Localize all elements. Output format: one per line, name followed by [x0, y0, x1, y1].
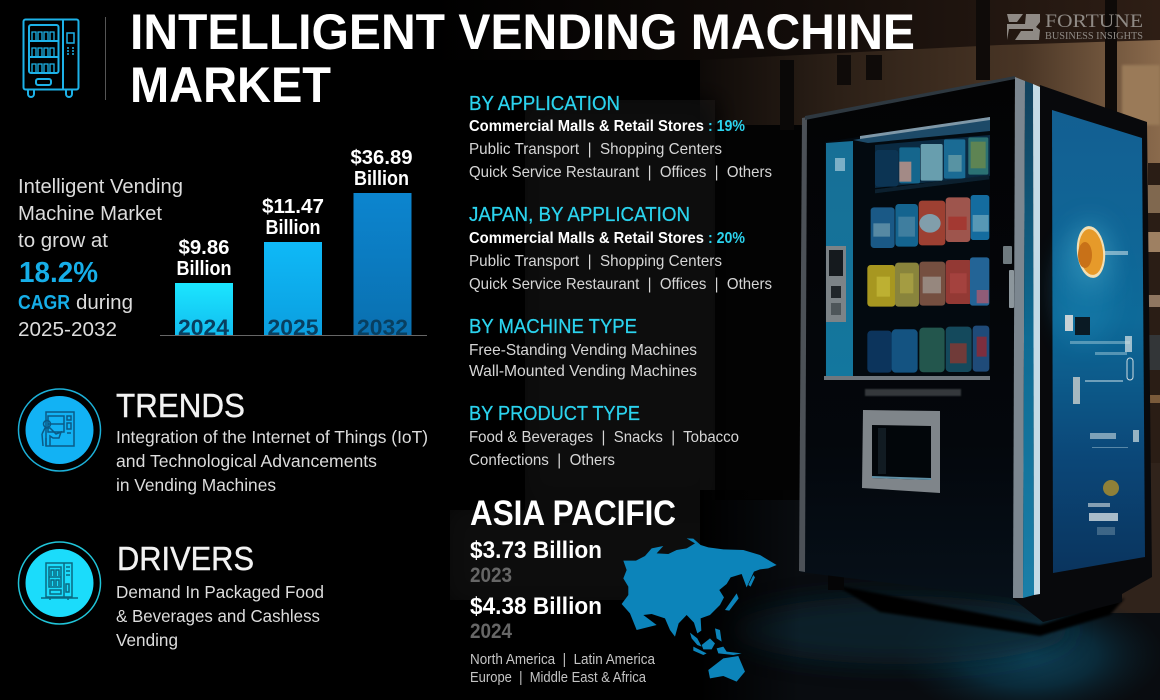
- logo: Fortune Business Insights: [1007, 11, 1143, 42]
- trends text: and Technological Advancements: [116, 451, 377, 471]
- segment: by machine type: BY MACHINE TYPE: [469, 316, 637, 338]
- regional heading and values: 2023: [470, 564, 512, 587]
- regional heading and values: Europe | Middle East & Africa: [470, 670, 647, 686]
- front window with products: [824, 117, 990, 380]
- segment: by application: Commercial Malls & Retail Stores: [469, 118, 704, 135]
- CAGR text block: during: [76, 292, 133, 314]
- bar chart: $11.47: [262, 196, 324, 218]
- title: INTELLIGENT VENDING MACHINE: [130, 4, 915, 60]
- CAGR text block: to grow at: [18, 230, 108, 252]
- bar chart: Billion: [176, 258, 232, 280]
- segment: by machine type: Free-Standing Vending Machines: [469, 342, 697, 359]
- trends text: in Vending Machines: [116, 475, 276, 495]
- bar chart: [160, 147, 427, 340]
- bar chart: $36.89: [350, 147, 412, 169]
- drivers text: Vending: [116, 630, 178, 650]
- segment: by application: : 19%: [708, 118, 745, 135]
- door handle: [1003, 246, 1014, 308]
- trends text: Integration of the Internet of Things (IoT): [116, 427, 428, 447]
- logo: Fortune Business Insights: BUSINESS INSIGHTS: [1045, 31, 1143, 42]
- regional heading and values: ASIA PACIFIC: [470, 494, 676, 533]
- CAGR text block: Intelligent Vending: [18, 176, 183, 198]
- trends text: TRENDS: [116, 387, 245, 424]
- bar chart: $9.86: [178, 237, 230, 259]
- title: [130, 4, 915, 113]
- segment: by product type: [469, 403, 739, 469]
- icon: trends badge: [18, 389, 100, 471]
- bar chart: 2032: [357, 315, 408, 340]
- segment: Japan by application: Commercial Malls & Retail Stores: [469, 230, 704, 247]
- icon: drivers badge: [18, 542, 100, 624]
- CAGR text block: Machine Market: [18, 203, 162, 225]
- side panel artwork: [1065, 221, 1139, 535]
- regional heading and values: $3.73 Billion: [470, 537, 602, 564]
- drivers text: & Beverages and Cashless: [116, 606, 320, 626]
- CAGR text block: 18.2%: [19, 257, 98, 289]
- title: MARKET: [130, 57, 331, 113]
- header divider: [105, 17, 106, 100]
- segment: Japan by application: Quick Service Restaurant | Offices | Others: [469, 276, 772, 293]
- regional heading and values: North America | Latin America: [470, 652, 656, 668]
- bar chart: 2024: [178, 315, 230, 340]
- regional heading and values: 2024: [470, 620, 512, 643]
- bar chart: 2025: [268, 315, 318, 340]
- machine label strip: [865, 389, 961, 396]
- CAGR text block: 2025-2032: [18, 319, 117, 341]
- drivers text: DRIVERS: [117, 540, 254, 577]
- drivers text: [116, 540, 324, 650]
- segment: Japan by application: : 20%: [708, 230, 745, 247]
- segment: by product type: Food & Beverages | Snacks | Tobacco: [469, 429, 739, 446]
- segment: by product type: BY PRODUCT TYPE: [469, 403, 640, 425]
- drivers text: Demand In Packaged Food: [116, 582, 324, 602]
- segment: Japan by application: JAPAN, BY APPLICATION: [469, 204, 690, 226]
- trends text: [116, 387, 428, 495]
- photo: vending machine: [799, 76, 1152, 636]
- segment: by application: Quick Service Restaurant | Offices | Others: [469, 164, 772, 181]
- bar chart: Billion: [266, 217, 320, 239]
- logo: Fortune Business Insights: FORTUNE: [1045, 11, 1143, 32]
- segment: by machine type: [469, 316, 697, 380]
- segment: by machine type: Wall-Mounted Vending Machines: [469, 363, 697, 380]
- dispensing slot: [862, 410, 940, 493]
- icon: vending machine header: [24, 20, 78, 97]
- map: Asia Pacific: [622, 538, 777, 682]
- segment: Japan by application: [469, 204, 772, 293]
- segment: by product type: Confections | Others: [469, 452, 615, 469]
- regional heading and values: [470, 494, 676, 686]
- segment: Japan by application: Public Transport | Shopping Centers: [469, 253, 722, 270]
- bar chart: Billion: [354, 168, 409, 190]
- CAGR text block: [18, 176, 183, 341]
- segment: by application: Public Transport | Shopping Centers: [469, 141, 722, 158]
- CAGR text block: CAGR: [18, 292, 70, 314]
- regional heading and values: $4.38 Billion: [470, 593, 602, 620]
- segment: by application: BY APPLICATION: [469, 93, 620, 115]
- segment: by application: [469, 93, 772, 181]
